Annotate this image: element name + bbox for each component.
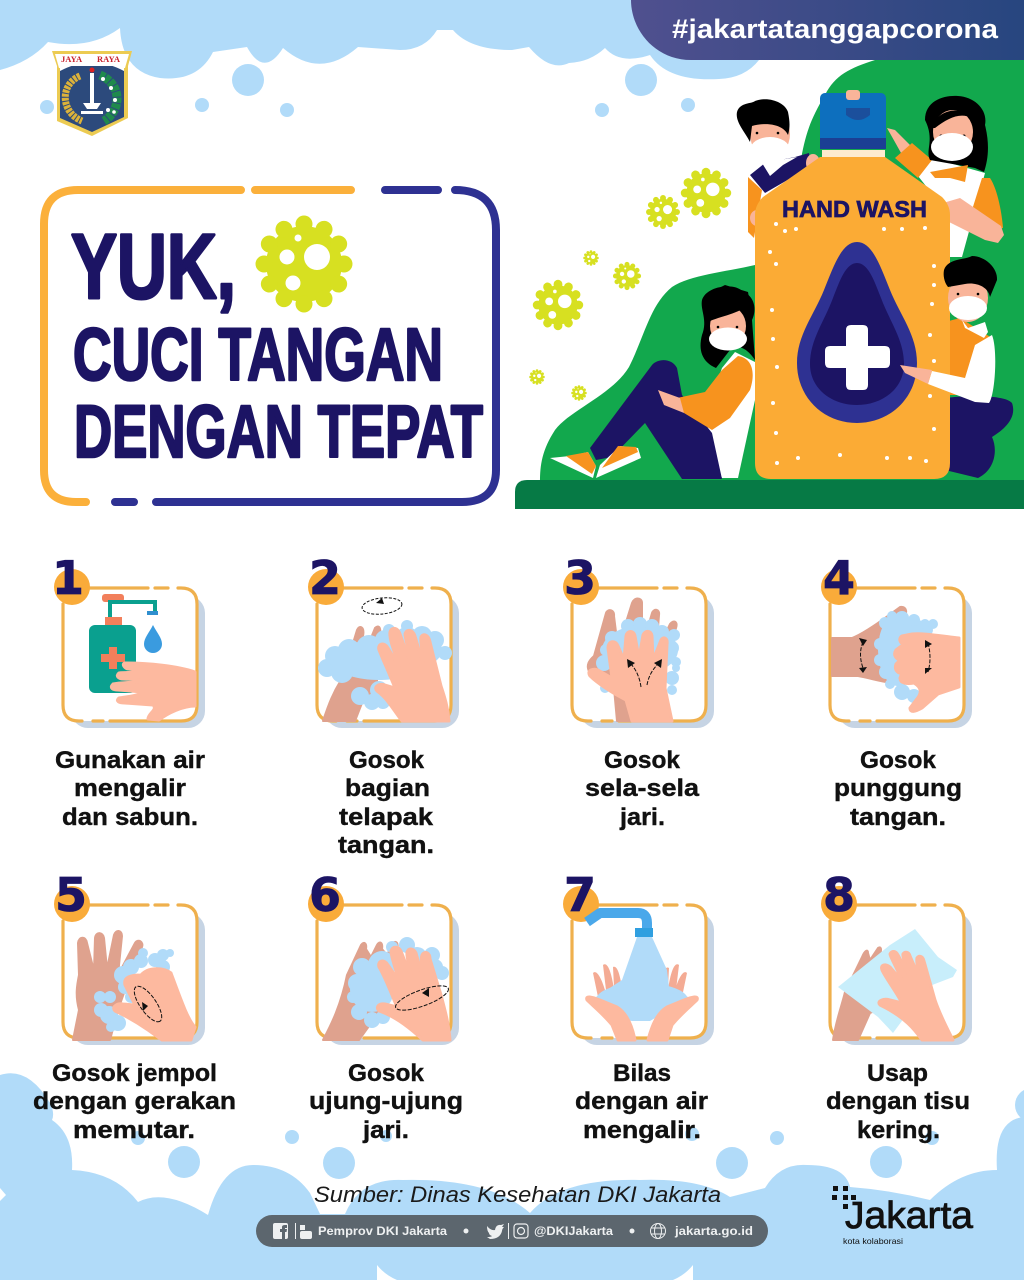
frame <box>317 905 459 1045</box>
icon: rotation arrow <box>129 982 167 1026</box>
caption step 2: bagian <box>345 775 430 802</box>
caption step 6: jari. <box>362 1117 409 1144</box>
bottle cap <box>820 90 886 157</box>
icon: twitter <box>487 1224 504 1239</box>
caption step 1: dan sabun. <box>62 804 198 831</box>
caption step 8: kering. <box>857 1117 940 1144</box>
bottom cloud <box>0 1073 1024 1280</box>
icon: dark hand <box>588 598 677 721</box>
step 3 <box>563 551 714 728</box>
icon: dark hand <box>832 607 906 683</box>
number badge: 8 <box>823 868 855 922</box>
icon: back fingers <box>593 964 687 997</box>
step 5 <box>54 868 205 1045</box>
soap bubbles <box>874 611 938 703</box>
icon: light hand <box>376 628 449 721</box>
caption step 2: Gosok <box>349 747 425 774</box>
icon: arrows <box>859 638 932 674</box>
illustration: hand wash scene <box>515 60 1024 509</box>
title frame <box>44 190 496 502</box>
icon: youtube <box>300 1225 312 1239</box>
title line: CUCI TANGAN: CUCI TANGAN <box>73 313 443 396</box>
character: boy right torso <box>945 318 992 395</box>
caption step 8: Usap <box>867 1060 928 1087</box>
icon: dark hand <box>833 947 890 1040</box>
frame <box>830 588 972 728</box>
Jakarta kota kolaborasi logo <box>832 1186 974 1246</box>
icon: instagram <box>514 1224 528 1238</box>
icon: rotation arrow <box>361 596 403 616</box>
caption step 6: Gosok <box>348 1060 425 1087</box>
caption step 8 <box>826 1060 970 1144</box>
frame <box>317 588 459 728</box>
icon: dark hand <box>73 931 142 1040</box>
frame <box>63 905 205 1045</box>
icon: light hand <box>589 631 672 721</box>
icon: hand <box>111 663 195 720</box>
caption step 4 <box>834 747 962 831</box>
character: girl top right <box>887 96 1004 257</box>
soap bubbles <box>318 620 452 710</box>
icon: light hand <box>895 634 959 711</box>
character: boy right legs <box>945 396 1013 478</box>
icon: Jakarta coat of arms: JAYA <box>61 54 83 64</box>
soap bubbles <box>347 937 449 1028</box>
caption step 4: punggung <box>834 775 962 802</box>
caption step 7: Bilas <box>613 1060 671 1087</box>
bottle body <box>755 157 950 479</box>
icon: tissue <box>838 929 957 1033</box>
icon: cupped hands <box>587 997 697 1040</box>
number badge: 2 <box>309 551 341 605</box>
caption step 6: ujung-ujung <box>309 1088 463 1115</box>
caption step 7: dengan air <box>575 1088 708 1115</box>
bottle dots <box>768 222 936 465</box>
icon: light hand <box>879 951 953 1040</box>
icon: rotation arrow <box>393 981 451 1015</box>
icon: virus in title <box>256 216 352 312</box>
source line: Sumber: Dinas Kesehatan DKI Jakarta <box>314 1182 721 1207</box>
title <box>71 216 483 473</box>
icon: arrows <box>627 659 662 687</box>
icon: light hand <box>114 969 195 1040</box>
caption step 3: Gosok <box>604 747 681 774</box>
caption step 3: sela-sela <box>585 775 700 802</box>
character: boy top left <box>737 99 820 238</box>
social media bar <box>256 1215 768 1247</box>
text: twitter and instagram handle: @DKIJakarta <box>534 1224 613 1238</box>
character: boy right front <box>900 256 997 403</box>
icon: dark hand <box>323 626 380 721</box>
label: HAND WASH: HAND WASH <box>782 196 927 222</box>
caption step 5 <box>33 1060 236 1144</box>
number badge: 4 <box>823 551 855 605</box>
icon: drop with cross <box>797 242 917 423</box>
caption step 2 <box>338 747 434 859</box>
hashtag banner <box>631 0 1024 60</box>
icon: light hand <box>377 947 450 1040</box>
icon: water stream <box>596 937 688 1021</box>
title line: DENGAN TEPAT: DENGAN TEPAT <box>74 390 483 473</box>
frame <box>63 588 205 728</box>
logo tagline: kota kolaborasi <box>843 1236 903 1246</box>
caption step 3: jari. <box>619 804 665 831</box>
step 4 <box>821 551 972 728</box>
text: facebook and youtube handle: Pemprov DKI Jakarta <box>318 1224 447 1238</box>
logo pixel dots <box>832 1186 856 1209</box>
caption step 1: mengalir <box>74 775 186 802</box>
icon: faucet <box>587 913 653 937</box>
caption step 4: tangan. <box>850 804 946 831</box>
caption step 5: memutar. <box>73 1117 195 1144</box>
caption step 5: Gosok jempol <box>52 1060 217 1087</box>
caption step 5: dengan gerakan <box>33 1088 236 1115</box>
caption step 8: dengan tisu <box>826 1088 970 1115</box>
caption step 7 <box>575 1060 708 1144</box>
top cloud <box>0 0 1024 79</box>
bottom bubbles <box>131 1127 939 1179</box>
ground <box>515 480 1024 509</box>
caption step 7: mengalir. <box>583 1117 701 1144</box>
logo wordmark: Jakarta <box>845 1195 974 1237</box>
number badge: 6 <box>309 868 341 922</box>
caption step 1: Gunakan air <box>55 747 205 774</box>
title line: YUK,: YUK, <box>71 216 236 318</box>
caption step 3 <box>585 747 700 831</box>
step 8 <box>821 868 972 1045</box>
text: website: jakarta.go.id <box>674 1224 753 1238</box>
soap bubbles <box>596 617 681 695</box>
green blob backdrop <box>540 60 1024 482</box>
icon: dark hand <box>323 942 398 1040</box>
caption step 2: tangan. <box>338 832 434 859</box>
step 2 <box>308 551 459 728</box>
icon: Jakarta coat of arms: RAYA <box>97 54 121 64</box>
icon: soap dispenser <box>89 594 162 693</box>
number badge: 1 <box>52 551 84 605</box>
number badge: 5 <box>55 868 87 922</box>
floating viruses <box>529 168 731 401</box>
caption step 6 <box>309 1060 463 1144</box>
step 6 <box>308 868 459 1045</box>
top bubbles <box>40 64 695 117</box>
step 7 <box>563 868 714 1045</box>
number badge: 3 <box>564 551 596 605</box>
number badge: 7 <box>564 868 596 922</box>
frame <box>572 905 714 1045</box>
icon: globe <box>650 1224 666 1238</box>
icon: Jakarta coat of arms <box>52 51 132 136</box>
caption step 2: telapak <box>339 804 434 831</box>
step 1 <box>52 551 205 728</box>
frame <box>830 905 972 1045</box>
soap bubbles <box>94 948 174 1032</box>
character: seated girl <box>550 285 755 479</box>
icon: facebook <box>273 1223 288 1239</box>
caption step 1 <box>55 747 205 831</box>
frame <box>572 588 714 728</box>
hashtag banner: #jakartatanggapcorona <box>672 14 999 44</box>
caption step 4: Gosok <box>860 747 937 774</box>
